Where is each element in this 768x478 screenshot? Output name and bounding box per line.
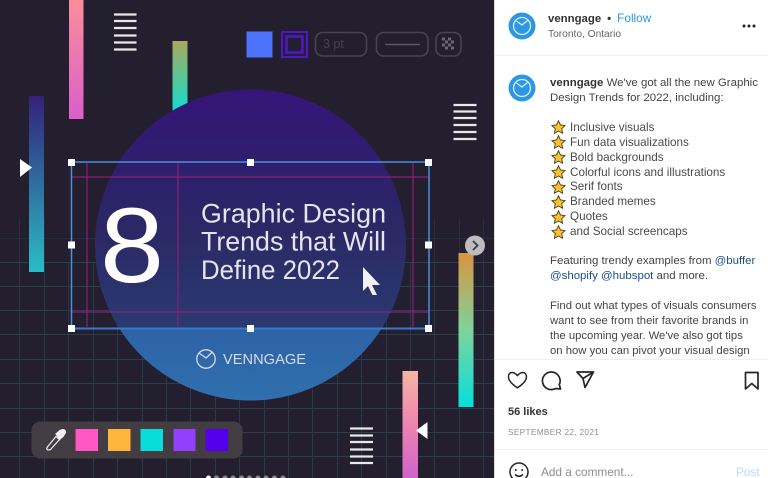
list of trends: Fun data visualizations <box>570 136 689 149</box>
bar: pink top <box>69 0 84 119</box>
logo: venngage <box>197 350 306 368</box>
logo: venngage: VENNGAGE <box>223 351 306 368</box>
palette toolbar <box>32 422 242 458</box>
caption closing: on how you can pivot your visual design <box>550 345 750 357</box>
caption examples <box>550 255 756 282</box>
field: 3 pt <box>316 32 366 56</box>
caption closing: the upcoming year. We've also got tips <box>550 330 743 342</box>
caption avatar <box>508 74 536 102</box>
bar: blue left <box>29 96 44 272</box>
likes count: 56 likes <box>508 406 548 418</box>
icon: more menu <box>742 24 756 28</box>
selection box <box>68 159 432 332</box>
list of trends: Branded memes <box>570 195 656 208</box>
swatch: purple outline <box>282 32 307 57</box>
icon: comment <box>542 372 560 390</box>
caption intro: Design Trends for 2022, including: <box>550 92 724 104</box>
icon: lines top left <box>114 14 136 50</box>
list of trends: Quotes <box>570 210 608 223</box>
icon: right triangle marker <box>416 422 428 439</box>
carousel dots <box>206 476 286 478</box>
caption closing: Find out what types of visuals consumers <box>550 300 757 312</box>
icon: share <box>577 372 594 388</box>
caption examples: @shopify @hubspot and more. <box>550 270 708 282</box>
header avatar <box>508 12 536 40</box>
list of trends: Bold backgrounds <box>570 151 664 164</box>
icon: emoji <box>509 462 529 478</box>
caption examples: Featuring trendy examples from @buffer <box>550 255 755 267</box>
swatches <box>76 429 228 451</box>
caption closing <box>550 300 757 357</box>
field: transparency <box>436 32 461 56</box>
bar: pink bottom <box>402 371 418 478</box>
field: line style <box>376 32 428 56</box>
swatch: blue fill <box>246 32 272 58</box>
icon: eyedropper <box>47 430 66 450</box>
icon: bookmark <box>746 372 758 389</box>
heading: Define 2022 <box>201 255 340 285</box>
header location: Toronto, Ontario <box>548 29 621 40</box>
caption intro <box>550 77 758 104</box>
panel: design artwork <box>0 0 494 478</box>
caption intro: venngage We've got all the new Graphic <box>550 77 758 89</box>
icon: next arrow <box>465 236 485 256</box>
heading <box>201 198 386 285</box>
icon: lines bottom <box>350 428 373 463</box>
panel: instagram sidebar <box>494 0 768 478</box>
guides: magenta grid <box>72 163 429 327</box>
list of trends: Colorful icons and illustrations <box>570 166 725 179</box>
icon: heart <box>508 372 526 388</box>
post date: SEPTEMBER 22, 2021 <box>508 427 599 437</box>
number 8: 8 <box>100 185 164 305</box>
list of trends: and Social screencaps <box>570 225 688 238</box>
heading: Trends that Will <box>201 226 386 256</box>
toolbar: stroke options <box>246 32 461 58</box>
heading: Graphic Design <box>201 198 386 228</box>
list of trends: Inclusive visuals <box>570 121 654 134</box>
list of trends <box>551 120 725 240</box>
icon: left triangle marker <box>20 159 32 177</box>
bar: orange right <box>458 253 474 407</box>
icon: lines right <box>454 105 476 139</box>
action icons <box>508 371 759 390</box>
caption closing: want to see from their favorite brands in <box>550 315 748 327</box>
field: 3 pt: 3 pt <box>323 37 344 51</box>
circle <box>95 90 406 400</box>
icon: cursor <box>363 267 380 295</box>
header username: venngage • Follow <box>548 11 651 25</box>
list of trends: Serif fonts <box>570 180 623 193</box>
bar: green top <box>172 41 188 113</box>
